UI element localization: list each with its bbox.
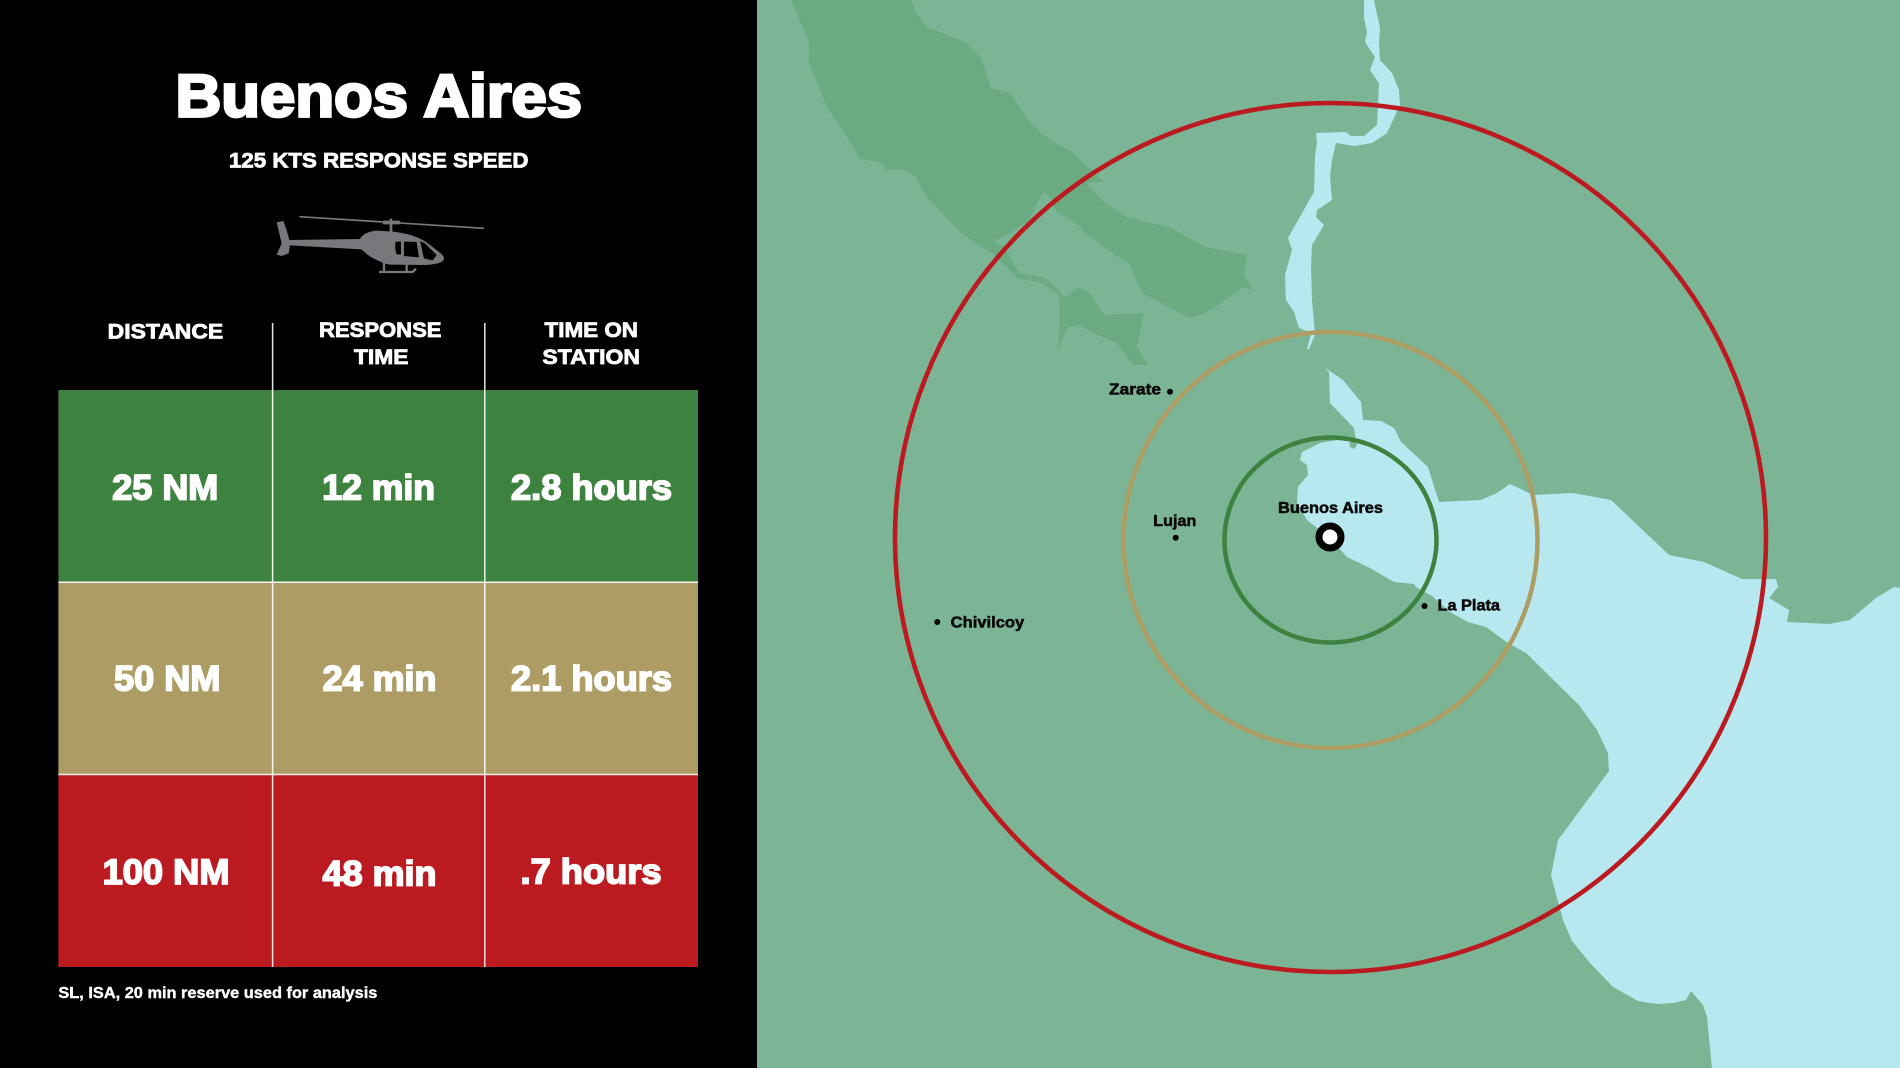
table header: response time: RESPONSE xyxy=(319,319,442,342)
ring: 100 NM xyxy=(895,103,1766,972)
table header: time on station: TIME ON xyxy=(544,319,638,342)
table row: 50 NM: 24 min xyxy=(323,660,436,699)
title: Buenos Aires xyxy=(176,63,582,130)
subtitle: 125 KTS RESPONSE SPEED xyxy=(229,149,528,173)
panel: map xyxy=(757,0,1900,1068)
table row: 100 NM: .7 hours xyxy=(520,853,662,892)
city: La Plata: La Plata xyxy=(1438,598,1500,615)
table row: 25 NM: 12 min xyxy=(322,468,435,507)
table header: response time xyxy=(319,319,442,369)
table row: 25 NM: 2.8 hours xyxy=(511,468,672,507)
city: Zarate: Zarate xyxy=(1109,381,1161,398)
table row: 25 NM: 25 NM xyxy=(112,468,218,507)
panel: response table sidebar xyxy=(0,0,757,1068)
footnote: SL, ISA, 20 min reserve used for analysis xyxy=(58,985,377,1002)
table row: 50 NM xyxy=(58,582,698,774)
table header: time on station xyxy=(542,319,640,369)
map land background xyxy=(757,0,1900,1068)
table row: 100 NM: 48 min xyxy=(323,855,436,894)
ring: 50 NM xyxy=(1124,332,1538,748)
estuary and ocean xyxy=(1297,367,1900,1068)
marker: Buenos Aires xyxy=(1319,526,1341,548)
table row: 50 NM: 50 NM xyxy=(114,660,220,699)
table row: 50 NM: 2.1 hours xyxy=(511,660,672,699)
label: Buenos Aires: Buenos Aires xyxy=(1278,500,1383,517)
icon: helicopter xyxy=(277,217,484,272)
table header: time on station: STATION xyxy=(542,346,640,369)
table header: distance: DISTANCE xyxy=(108,321,223,344)
city: Lujan xyxy=(1153,513,1196,541)
river xyxy=(1285,0,1400,349)
sidebar background xyxy=(0,0,757,1068)
table row: 100 NM: 100 NM xyxy=(103,853,230,892)
wetlands delta xyxy=(791,0,1253,365)
table row: 100 NM xyxy=(58,774,698,967)
city: Chivilcoy: Chivilcoy xyxy=(951,614,1024,632)
ring: 25 NM xyxy=(1224,438,1436,642)
table header: response time: TIME xyxy=(354,346,408,369)
city: Lujan: Lujan xyxy=(1153,513,1196,530)
table row: 25 NM xyxy=(58,390,698,582)
